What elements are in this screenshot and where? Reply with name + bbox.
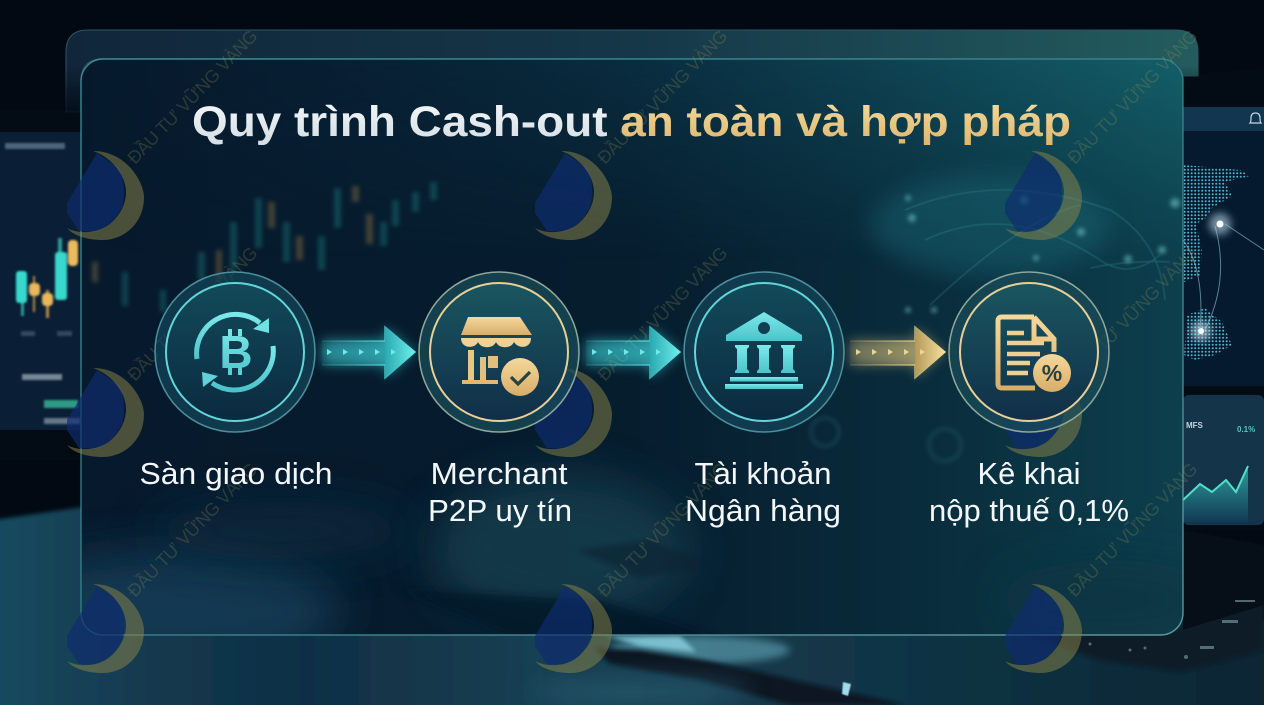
step 1: exchange <box>155 272 315 432</box>
blurred candlesticks <box>92 182 437 312</box>
icon: document with percent <box>998 317 1071 392</box>
label: step 1: Sàn giao dịch <box>140 456 332 491</box>
blurred keyboard <box>584 541 680 577</box>
blurred gauges <box>811 418 961 461</box>
desk surface <box>0 506 1264 705</box>
watermark logo 4 <box>67 368 144 457</box>
right monitor: MFS <box>1186 421 1204 430</box>
watermark text: ĐẦU TƯ VỮNG VÀNG <box>123 242 262 385</box>
panel border <box>81 59 1183 635</box>
watermark logo 3 <box>1005 151 1082 240</box>
watermark logo 1 <box>67 151 144 240</box>
step 2: merchant <box>419 272 579 432</box>
watermark logo 6 <box>1005 368 1082 457</box>
watermark text: ĐẦU TƯ VỮNG VÀNG <box>123 458 262 601</box>
laptop bright edge <box>530 636 905 705</box>
arrow 2 <box>586 327 680 378</box>
watermark text <box>123 25 1202 601</box>
icon: bitcoin with circular arrows <box>197 314 273 390</box>
watermark logo 5 <box>535 368 612 457</box>
label: step 2 <box>428 456 572 528</box>
right monitor <box>1180 68 1264 530</box>
front glass panel <box>80 58 1184 636</box>
label: step 4: Kê khai <box>978 456 1080 491</box>
icon: storefront with check <box>461 317 539 396</box>
right monitor: 0.1% <box>1237 425 1255 434</box>
badge <box>949 272 1109 432</box>
keyboard <box>1010 530 1264 672</box>
watermark text: ĐẦU TƯ VỮNG VÀNG <box>1063 242 1202 385</box>
watermark logo 8 <box>535 584 612 673</box>
left monitor <box>0 110 82 460</box>
label: step 4 <box>929 456 1129 528</box>
watermark logo 9 <box>1005 584 1082 673</box>
icon: bitcoin with circular arrows: B <box>219 326 253 378</box>
step 4: tax <box>949 272 1109 432</box>
bell icon <box>1250 113 1261 123</box>
back panel <box>66 30 1198 112</box>
icon: bank <box>725 312 803 389</box>
step 3: bank <box>684 272 844 432</box>
icon: document with percent: % <box>1042 360 1062 386</box>
watermark text: ĐẦU TƯ VỮNG VÀNG <box>123 25 262 168</box>
watermark text: ĐẦU TƯ VỮNG VÀNG <box>593 242 732 385</box>
watermark text: ĐẦU TƯ VỮNG VÀNG <box>593 25 732 168</box>
label: step 2: Merchant <box>430 456 568 491</box>
watermark text: ĐẦU TƯ VỮNG VÀNG <box>1063 458 1202 601</box>
watermark text: ĐẦU TƯ VỮNG VÀNG <box>1063 25 1202 168</box>
map dots <box>1184 165 1250 282</box>
arrow 1 <box>322 327 415 378</box>
label: step 3 <box>685 456 841 528</box>
label: step 4: nộp thuế 0,1% <box>929 493 1129 528</box>
badge <box>419 272 579 432</box>
watermark logo 2 <box>535 151 612 240</box>
label: step 3: Tài khoản <box>694 456 832 491</box>
label: step 2: P2P uy tín <box>428 493 572 528</box>
badge <box>684 272 844 432</box>
blurred world map <box>870 175 1180 313</box>
blurred desk <box>82 536 347 634</box>
badge <box>155 272 315 432</box>
watermark text: ĐẦU TƯ VỮNG VÀNG <box>593 458 732 601</box>
arrow 3 <box>850 327 945 378</box>
title: Quy trình Cash-out an toàn và hợp pháp <box>192 98 1071 146</box>
watermark logo 7 <box>67 584 144 673</box>
label: step 3: Ngân hàng <box>685 493 841 528</box>
